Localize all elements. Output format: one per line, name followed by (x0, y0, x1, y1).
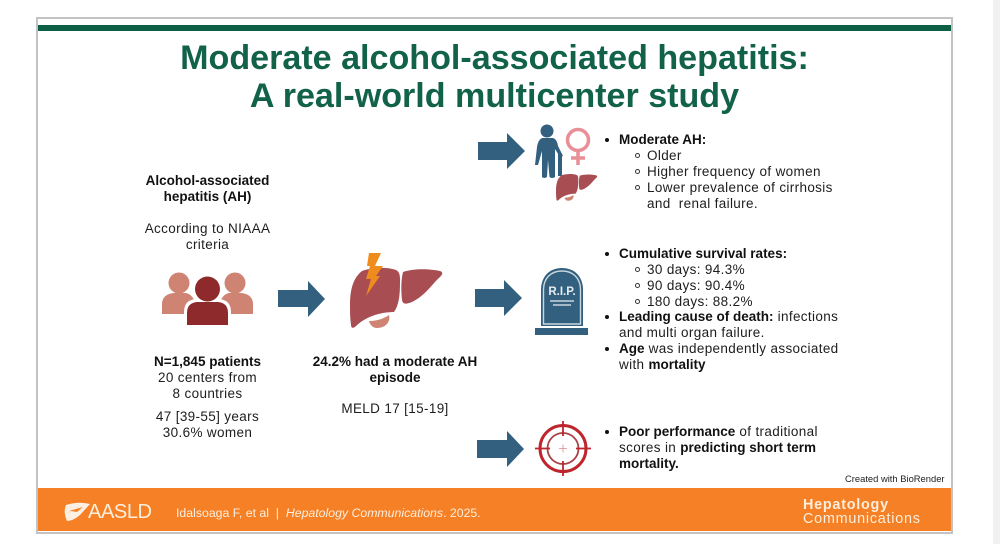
left column: study population (144, 173, 270, 440)
text: patient numbers: N=1,845 patients (154, 354, 261, 369)
text: patient numbers: 8 countries (173, 386, 242, 401)
bullet: poor performance: Poor performance of traditional (619, 424, 818, 439)
sub-bullets: survival rates (647, 262, 753, 309)
bullet: poor performance: mortality. (619, 456, 679, 471)
text: age and sex (156, 409, 259, 440)
citation: Idalsoaga F, et al | Hepatology Communications. 2025. (176, 506, 481, 520)
text: patient numbers: 20 centers from (158, 370, 257, 385)
icon: AASLD mark (64, 502, 90, 521)
panel: survival findings (605, 246, 839, 372)
bullet: poor performance (619, 424, 818, 471)
logo: Hepatology Communications (803, 497, 921, 527)
heading: alcohol-associated hepatitis: Alcohol-associated (146, 173, 269, 188)
sub-bullets: survival rates: 180 days: 88.2% (647, 294, 753, 309)
top green bar (38, 25, 951, 31)
logo: Hepatology Communications: Hepatology (803, 497, 889, 513)
text: NIAAA criteria (144, 221, 270, 252)
logo: AASLD (64, 501, 152, 523)
logo: Hepatology Communications: Communications (803, 511, 921, 527)
text: AASLD wordmark: AASLD (88, 501, 152, 523)
bullet: poor performance: scores in predicting short term (619, 440, 816, 455)
bullet: leading cause of death (619, 309, 838, 340)
text: MELD score: MELD 17 [15-19] (341, 401, 449, 416)
icon: gravestone R.I.P. (535, 268, 588, 335)
heading: alcohol-associated hepatitis: hepatitis (AH) (164, 189, 251, 204)
icon: liver with lightning bolt (350, 253, 442, 328)
title: A real-world multicenter study (250, 76, 739, 114)
sub-bullets: survival rates: 90 days: 90.4% (647, 278, 745, 293)
title (180, 39, 809, 114)
panel: moderate AH findings (605, 132, 833, 211)
sub-bullets: moderate AH traits: Lower prevalence of cirrhosis (647, 180, 833, 195)
credit: BioRender: Created with BioRender (845, 473, 945, 484)
icon: patients group (162, 272, 253, 325)
bullet: leading cause of death: and multi organ failure. (619, 325, 765, 340)
bullet: age and mortality (619, 341, 839, 372)
icon: target crosshair (535, 421, 591, 476)
text: patient numbers (154, 354, 261, 401)
right edge strip (993, 0, 1000, 544)
text: moderate AH share: 24.2% had a moderate AH (313, 354, 477, 369)
sub-bullets: moderate AH traits: and renal failure. (647, 196, 758, 211)
sub-bullets: moderate AH traits: Higher frequency of women (647, 164, 821, 179)
text: age and sex: 30.6% women (163, 425, 252, 440)
bullet heading: moderate AH: Moderate AH: (619, 132, 706, 147)
text: NIAAA criteria: According to NIAAA (145, 221, 270, 236)
middle column: moderate AH episode (313, 253, 477, 416)
icon: older person, female symbol and liver (535, 124, 598, 201)
bullet: leading cause of death: Leading cause of death: infections (619, 309, 838, 324)
text: moderate AH share: episode (369, 370, 420, 385)
heading: alcohol-associated hepatitis (146, 173, 269, 204)
title: Moderate alcohol-associated hepatitis: (180, 39, 809, 77)
sub-bullets: moderate AH traits (647, 148, 833, 211)
bullet heading: survival rates: Cumulative survival rates: (619, 246, 787, 261)
arrow: to score findings (477, 431, 524, 467)
sub-bullets: moderate AH traits: Older (647, 148, 682, 163)
sub-bullets: survival rates: 30 days: 94.3% (647, 262, 745, 277)
text: moderate AH share (313, 354, 477, 385)
footer band (38, 488, 951, 531)
text: age and sex: 47 [39-55] years (156, 409, 259, 424)
icon: gravestone R.I.P.: R.I.P. (548, 286, 576, 298)
arrow: to survival findings (475, 280, 522, 316)
bullet: age and mortality: Age was independently associated (619, 341, 839, 356)
bullet: age and mortality: with mortality (619, 357, 706, 372)
panel: score performance findings (605, 424, 818, 471)
arrow: population to episode (278, 281, 325, 317)
text: NIAAA criteria: criteria (186, 237, 229, 252)
arrow: to moderate AH findings (478, 133, 525, 169)
